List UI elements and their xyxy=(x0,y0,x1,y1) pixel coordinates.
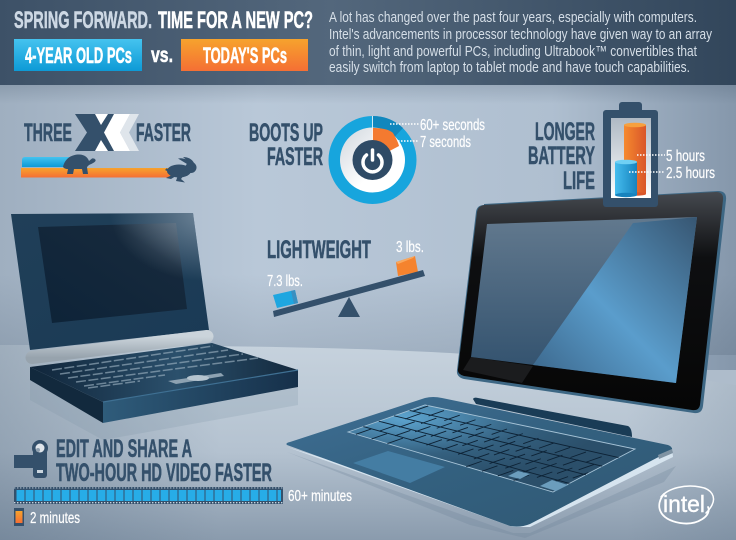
old laptop xyxy=(11,213,298,440)
heading: edit and share: EDIT AND SHARE A xyxy=(56,435,192,463)
intro paragraph xyxy=(329,10,713,76)
boots up faster panel xyxy=(249,116,485,204)
filmstrip: 2 minutes xyxy=(14,508,24,526)
button: today's PCs xyxy=(181,39,308,71)
keyboard key grid xyxy=(356,406,619,483)
label: 2 minutes: 2 minutes xyxy=(30,510,80,527)
label: 60+ seconds xyxy=(390,117,485,134)
label: 7.3 lbs: 7.3 lbs. xyxy=(267,273,303,290)
tablet base edge xyxy=(287,447,673,527)
keyboard xyxy=(348,405,635,492)
title: TIME FOR A NEW PC? xyxy=(158,7,313,34)
old laptop lid fog xyxy=(11,213,209,350)
table shading xyxy=(0,345,736,540)
filmstrip: 60+ minutes xyxy=(14,487,283,504)
bar: new speed xyxy=(21,168,171,178)
heading: longer battery life: BATTERY xyxy=(528,142,595,170)
heading: boots up faster: FASTER xyxy=(267,143,323,171)
longer battery life panel xyxy=(528,102,715,207)
old laptop screen xyxy=(38,223,187,323)
background shading xyxy=(0,85,736,355)
icon: battery xyxy=(603,102,658,207)
table surface xyxy=(0,345,736,540)
USB port xyxy=(658,449,673,459)
heading: faster: FASTER xyxy=(136,119,191,147)
heading: three: THREE xyxy=(24,119,72,147)
tablet bezel glare xyxy=(463,357,533,383)
tablet bezel xyxy=(458,192,723,410)
label: 7 seconds xyxy=(398,134,471,151)
intel logo xyxy=(659,486,714,524)
orange weight xyxy=(396,256,418,276)
seesaw fulcrum xyxy=(338,297,360,317)
heading: boots up faster: BOOTS UP xyxy=(249,119,323,147)
tablet base shadow xyxy=(287,452,676,538)
icon: turtle xyxy=(63,154,96,174)
label: 5 hours: 5 hours xyxy=(666,148,705,165)
heading: edit and share: TWO-HOUR HD VIDEO FASTER xyxy=(56,459,272,487)
button: today's PCs: TODAY'S PCs xyxy=(203,43,287,68)
icon: video camera xyxy=(14,440,48,478)
cylinder: orange 5 hours xyxy=(624,123,646,196)
label: 5 hours xyxy=(637,148,705,165)
heading: edit and share xyxy=(56,435,272,487)
three X faster panel xyxy=(21,114,196,182)
icon: rabbit xyxy=(165,157,196,182)
heading: boots up faster xyxy=(249,119,323,171)
background wall xyxy=(0,85,736,370)
title: SPRING FORWARD. xyxy=(14,7,152,34)
touchpad xyxy=(353,451,445,483)
label: 3 lbs: 3 lbs. xyxy=(396,239,424,256)
tablet base xyxy=(286,397,672,527)
button: 4-year old PCs xyxy=(14,39,142,71)
heading: longer battery life xyxy=(528,118,595,195)
old laptop touchpad xyxy=(168,373,224,384)
icon: power symbol xyxy=(363,150,382,172)
old laptop hinge xyxy=(32,336,207,358)
tablet hinge xyxy=(473,398,632,437)
heading: longer battery life: LIFE xyxy=(563,167,595,195)
tablet screen highlight xyxy=(533,217,697,383)
header banner xyxy=(0,0,736,85)
old laptop keyboard xyxy=(52,346,258,388)
label: 7 seconds: 7 seconds xyxy=(420,134,471,151)
intel logo: intel xyxy=(663,491,705,517)
icon: big X xyxy=(75,114,139,151)
vs label: vs. xyxy=(151,44,173,67)
label: 2.5 hours xyxy=(629,165,715,182)
label: 60+ minutes: 60+ minutes xyxy=(288,488,352,505)
old laptop reflection xyxy=(30,380,298,440)
heading: longer battery life: LONGER xyxy=(535,118,595,146)
old laptop base xyxy=(30,343,298,423)
label: 2.5 hours: 2.5 hours xyxy=(666,165,715,182)
video editing panel xyxy=(14,435,352,527)
tablet screen xyxy=(471,217,697,383)
tablet body xyxy=(457,191,726,413)
new tablet convertible xyxy=(286,191,726,538)
seesaw beam xyxy=(273,270,425,317)
button: 4-year old PCs: 4-YEAR OLD PCs xyxy=(25,43,132,68)
cylinder: blue 2.5 hours xyxy=(615,160,637,197)
blue weight xyxy=(273,290,298,308)
label: 60+ seconds: 60+ seconds xyxy=(420,117,485,134)
arrow keys xyxy=(508,471,530,479)
donut chart: boot time xyxy=(328,116,416,204)
bar: old speed xyxy=(22,157,72,167)
old laptop lid xyxy=(11,213,209,350)
heading: lightweight: LIGHTWEIGHT xyxy=(267,236,371,264)
lightweight panel xyxy=(267,236,425,317)
